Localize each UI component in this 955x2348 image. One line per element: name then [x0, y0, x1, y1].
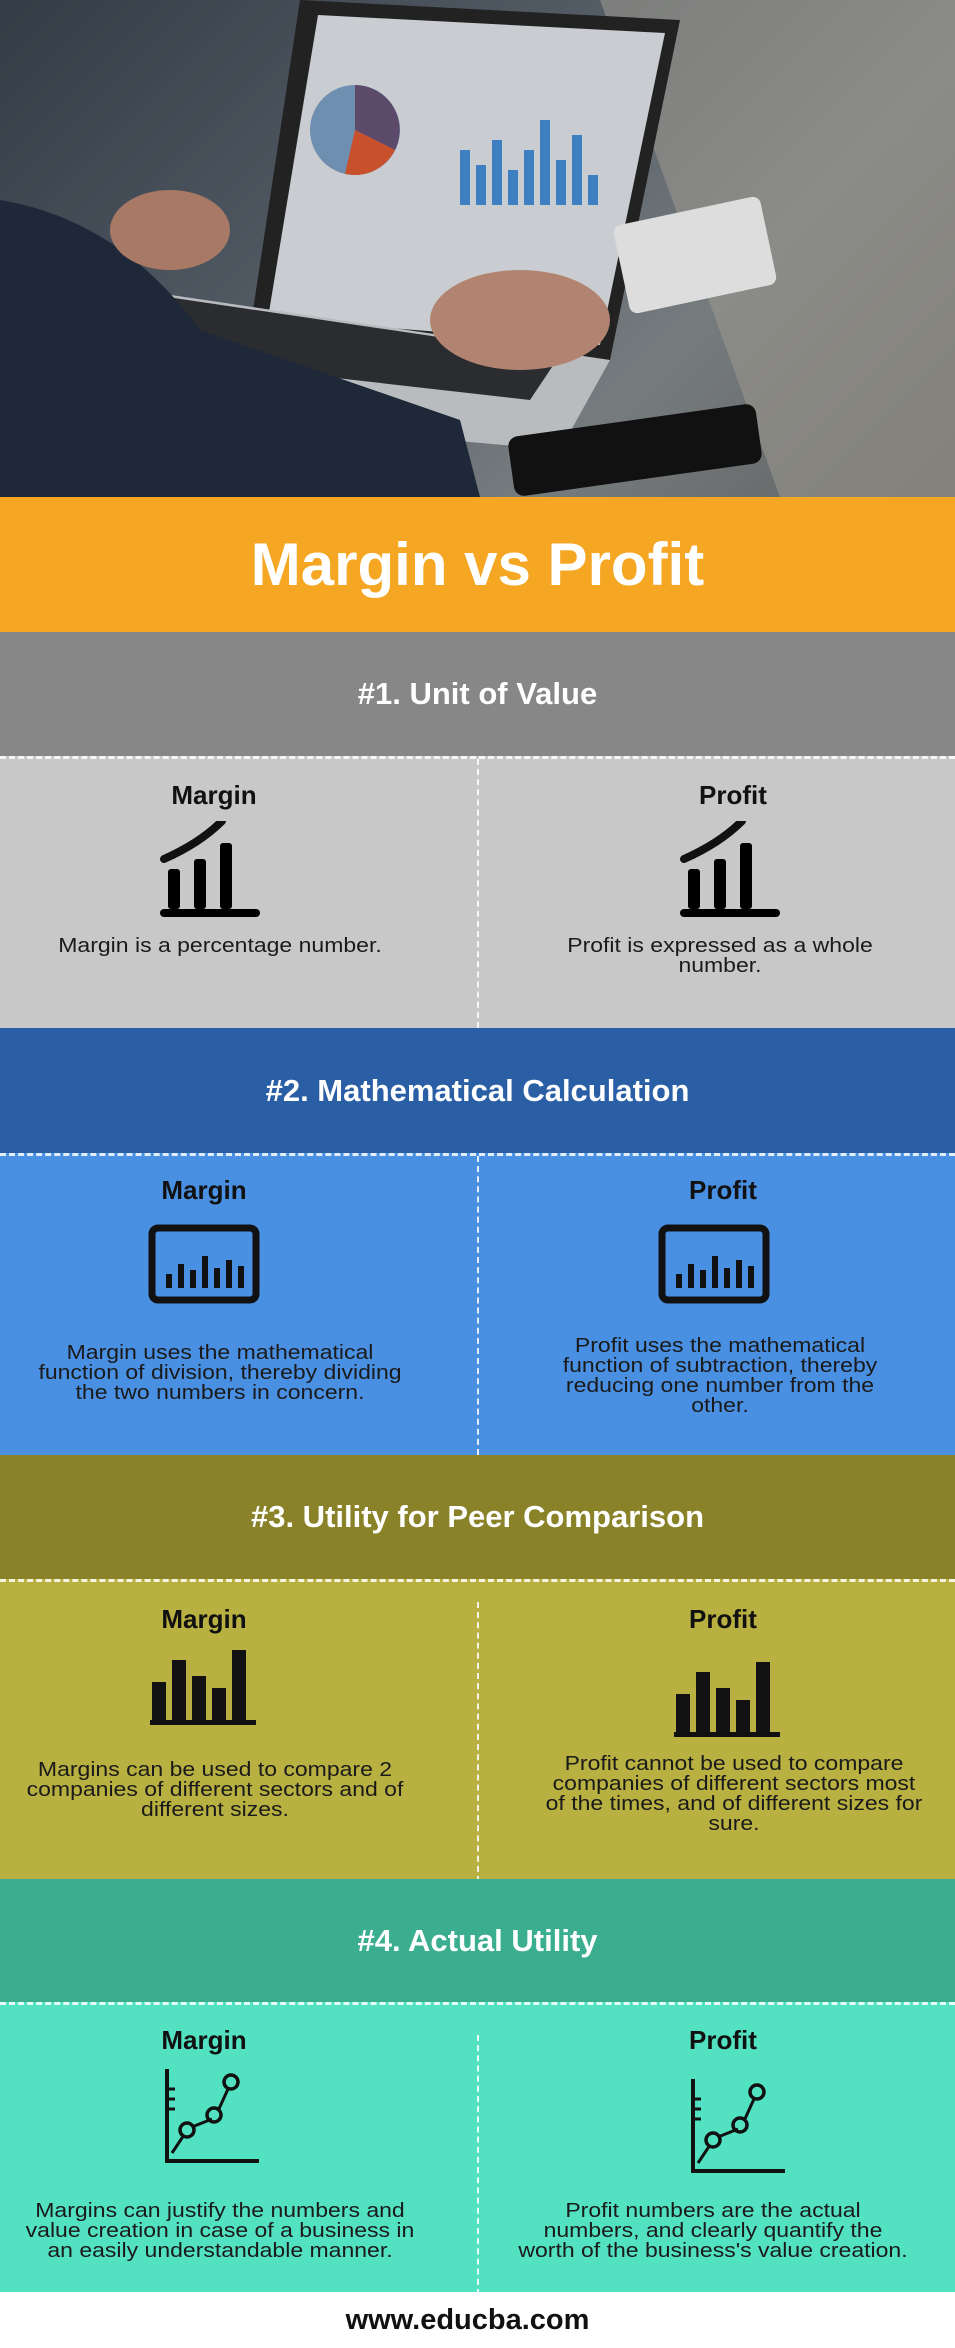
- title: Margin vs Profit: [251, 531, 704, 598]
- section 2 header: [0, 1028, 955, 1153]
- text: margin: different sizes.: [141, 1799, 289, 1821]
- icon: bar chart profit: [674, 1662, 780, 1737]
- label: profit: Profit: [689, 1604, 757, 1634]
- icon: line chart margin: [165, 2069, 259, 2163]
- label: margin: Margin: [161, 1604, 247, 1634]
- text: profit: [563, 1335, 878, 1417]
- section 1 body: [0, 756, 955, 1028]
- section 3 header: [0, 1455, 955, 1579]
- text: profit: Profit uses the mathematical: [575, 1335, 865, 1357]
- footer url: www.educba.com: [346, 2304, 589, 2336]
- text: profit: [546, 1753, 922, 1835]
- text: margin: [38, 1342, 402, 1404]
- text: profit: reducing one number from the: [566, 1375, 874, 1397]
- icon: bar growth margin: [160, 821, 260, 917]
- text: margin: Margins can justify the numbers and: [35, 2200, 405, 2222]
- text: profit: of the times, and of different sizes for: [546, 1793, 922, 1815]
- section 4 body: [0, 2002, 955, 2292]
- text: margin: function of division, thereby dividing: [38, 1362, 402, 1384]
- text: margin: value creation in case of a business in: [26, 2220, 414, 2242]
- icon: monitor chart margin: [148, 1224, 260, 1304]
- section 3 body: [0, 1579, 955, 1879]
- text: profit: numbers, and clearly quantify the: [544, 2220, 882, 2242]
- section 1 header: [0, 632, 955, 756]
- section 1 header: #1. Unit of Value: [358, 676, 597, 711]
- text: profit: other.: [691, 1395, 749, 1417]
- text: profit: [567, 935, 873, 977]
- section 3 header: #3. Utility for Peer Comparison: [251, 1499, 704, 1534]
- text: profit: worth of the business's value creation.: [518, 2240, 908, 2262]
- text: margin: [27, 1759, 404, 1821]
- icon: bar growth profit: [680, 821, 780, 917]
- text: profit: Profit numbers are the actual: [565, 2200, 861, 2222]
- section 4 header: [0, 1879, 955, 2002]
- text: margin: an easily understandable manner.: [47, 2240, 393, 2262]
- section 4 header: #4. Actual Utility: [357, 1922, 598, 1958]
- text: profit: function of subtraction, thereby: [563, 1355, 877, 1377]
- section 2 body: [0, 1153, 955, 1455]
- label: profit: Profit: [689, 1175, 757, 1205]
- label: margin: Margin: [161, 1175, 247, 1205]
- label: profit: Profit: [689, 2025, 757, 2055]
- title: [0, 497, 955, 632]
- header photo: [0, 0, 955, 497]
- text: margin: [26, 2200, 414, 2262]
- text: profit: Profit cannot be used to compare: [565, 1753, 903, 1775]
- label: margin: Margin: [161, 2025, 247, 2055]
- text: margin: Margin is a percentage number.: [58, 935, 382, 957]
- text: profit: sure.: [708, 1813, 760, 1835]
- text: margin: companies of different sectors and of: [27, 1779, 403, 1801]
- label: margin: Margin: [171, 780, 257, 810]
- label: profit: Profit: [699, 780, 767, 810]
- text: margin: Margins can be used to compare 2: [38, 1759, 392, 1781]
- text: profit: Profit is expressed as a whole: [567, 935, 873, 957]
- text: margin: the two numbers in concern.: [76, 1382, 364, 1404]
- icon: line chart profit: [691, 2079, 785, 2173]
- text: margin: Margin uses the mathematical: [67, 1342, 373, 1364]
- text: profit: [518, 2200, 908, 2262]
- text: profit: number.: [678, 955, 762, 977]
- icon: monitor chart profit: [658, 1224, 770, 1304]
- section 2 header: #2. Mathematical Calculation: [266, 1072, 689, 1108]
- icon: bar chart margin: [150, 1650, 256, 1725]
- text: profit: companies of different sectors most: [553, 1773, 915, 1795]
